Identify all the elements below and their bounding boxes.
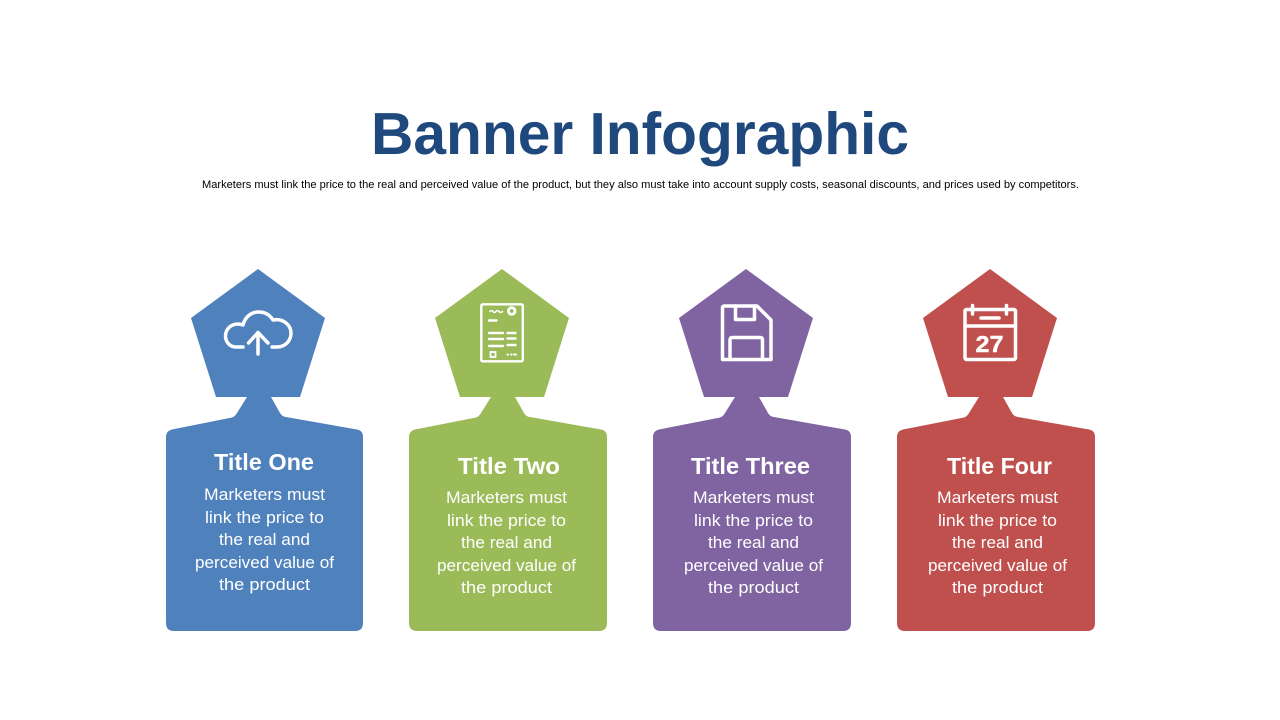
heading: Title Four: [947, 453, 1052, 479]
panel: title two: [409, 269, 607, 631]
body text: the product: [952, 578, 1043, 597]
body text: the product: [708, 578, 799, 597]
banner shape: green: [409, 269, 607, 631]
body text: perceived value of: [684, 556, 823, 575]
body text: the real and: [461, 533, 552, 552]
body text: [684, 488, 823, 597]
body text: perceived value of: [928, 556, 1067, 575]
body text: perceived value of: [437, 556, 576, 575]
icon: floppy disk: [722, 306, 771, 360]
body text: the real and: [952, 533, 1043, 552]
icon: document: [481, 304, 523, 361]
title: Banner Infographic: [371, 101, 909, 167]
subtitle: Marketers must link the price to the real and perceived value of the product, but they also must take into account supply costs, seasonal discounts, and prices used by competitors.: [202, 179, 1079, 191]
body text: [928, 488, 1067, 597]
panel: title one: [166, 269, 363, 631]
icon: calendar: 27: [976, 331, 1004, 357]
banner shape: blue: [166, 269, 363, 631]
body text: Marketers must: [446, 488, 567, 507]
body text: link the price to: [938, 511, 1057, 530]
body text: the real and: [219, 530, 310, 549]
body text: the product: [219, 575, 310, 594]
banner shape: purple: [653, 269, 851, 631]
icon: cloud upload: [226, 312, 291, 354]
body text: the product: [461, 578, 552, 597]
body text: the real and: [708, 533, 799, 552]
body text: link the price to: [694, 511, 813, 530]
panel: title three: [653, 269, 851, 631]
body text: Marketers must: [937, 488, 1058, 507]
body text: perceived value of: [195, 553, 334, 572]
body text: Marketers must: [693, 488, 814, 507]
body text: link the price to: [447, 511, 566, 530]
body text: [195, 485, 334, 594]
heading: Title One: [214, 449, 314, 475]
heading: Title Two: [458, 453, 560, 479]
body text: [437, 488, 576, 597]
body text: link the price to: [205, 508, 324, 527]
body text: Marketers must: [204, 485, 325, 504]
banner shape: red: [897, 269, 1095, 631]
heading: Title Three: [691, 453, 810, 479]
icon: calendar: [965, 306, 1016, 360]
panel: title four: [897, 269, 1095, 631]
